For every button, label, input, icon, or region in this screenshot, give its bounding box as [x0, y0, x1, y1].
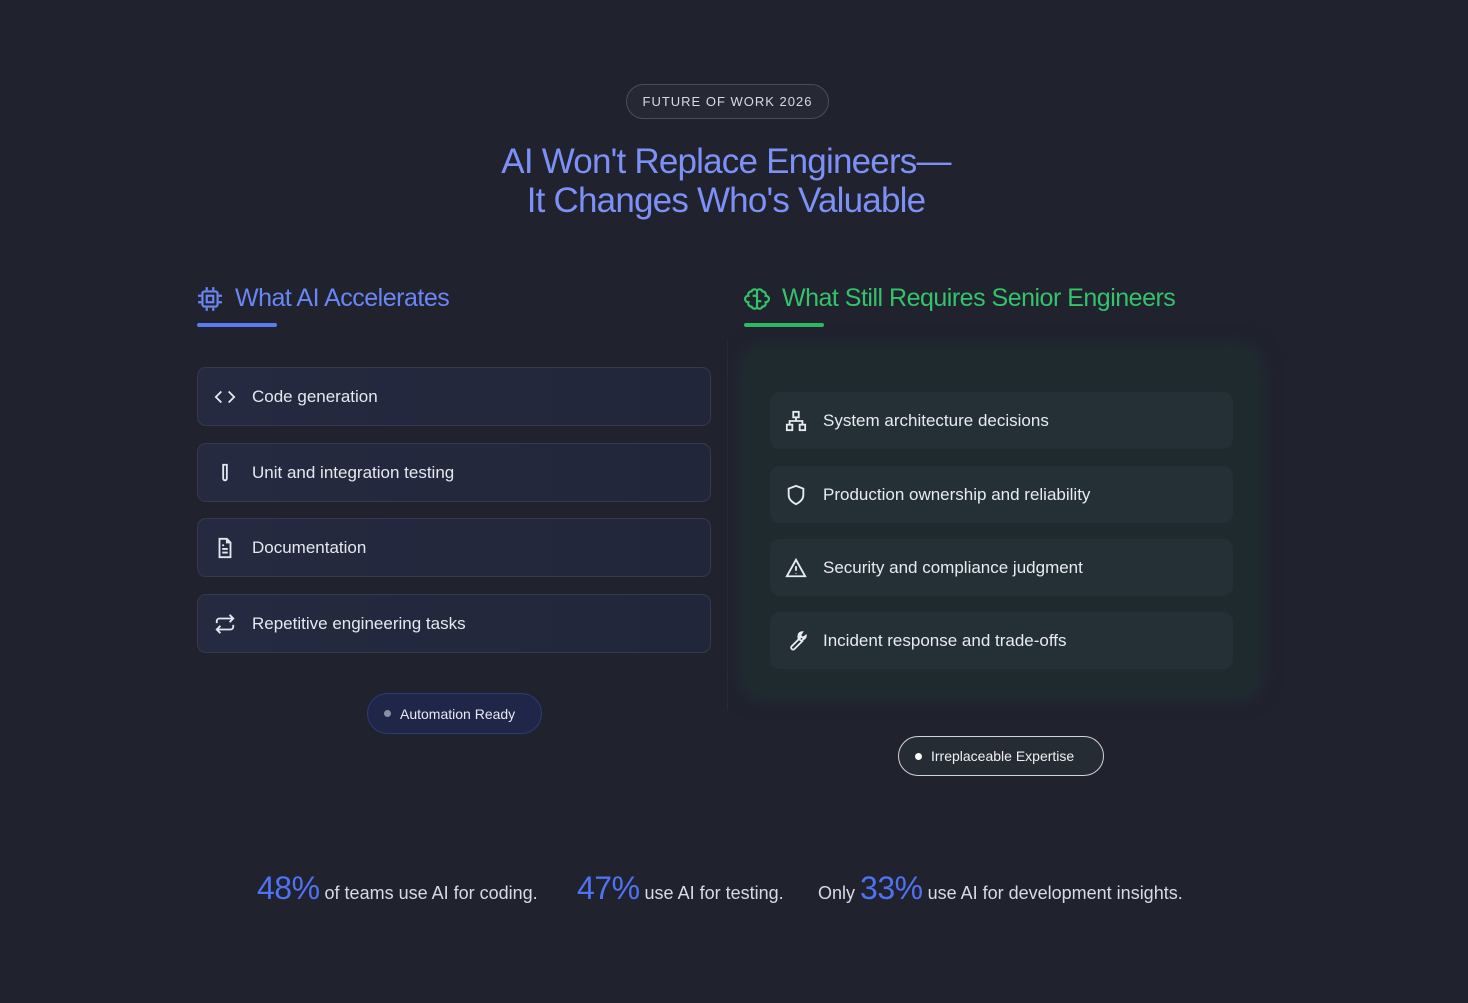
item: security [770, 539, 1233, 596]
item: security: Security and compliance judgment [823, 558, 1083, 576]
card: code generation [197, 367, 711, 426]
card: repetitive tasks [197, 594, 711, 653]
divider [727, 340, 728, 710]
title [501, 142, 952, 220]
stat: coding: 48% of teams use AI for coding. [257, 870, 538, 906]
item: architecture: System architecture decisions [823, 410, 1049, 430]
stat: testing: 47% use AI for testing. [577, 870, 784, 906]
item: production [770, 466, 1233, 523]
stat: insights: Only 33% use AI for development insights. [818, 870, 1183, 906]
icon: brain [744, 288, 770, 310]
card: documentation [197, 518, 711, 577]
item: incident: Incident response and trade-offs [823, 630, 1067, 650]
heading: senior engineers: What Still Requires Senior Engineers [782, 284, 1175, 312]
card: documentation: Documentation [252, 538, 366, 556]
item: architecture [770, 392, 1233, 449]
item: incident [770, 612, 1233, 669]
tag: irreplaceable expertise: Irreplaceable Expertise [931, 748, 1074, 764]
badge: future of work: FUTURE OF WORK 2026 [643, 94, 812, 109]
panel: senior engineers [745, 350, 1258, 695]
tag: automation ready: Automation Ready [400, 706, 515, 722]
card: testing [197, 443, 711, 502]
card: testing: Unit and integration testing [252, 462, 454, 482]
icon: chip [198, 287, 222, 311]
card: code generation: Code generation [252, 386, 378, 406]
item: production: Production ownership and reliability [823, 484, 1090, 504]
tag: irreplaceable expertise [898, 736, 1104, 776]
card: repetitive tasks: Repetitive engineering tasks [252, 614, 466, 632]
tag: automation ready [367, 693, 542, 734]
title: AI Won't Replace Engineers— [501, 142, 951, 181]
badge: future of work [626, 84, 829, 119]
heading: what AI accelerates: What AI Accelerates [235, 284, 449, 312]
title: It Changes Who's Valuable [527, 181, 925, 220]
